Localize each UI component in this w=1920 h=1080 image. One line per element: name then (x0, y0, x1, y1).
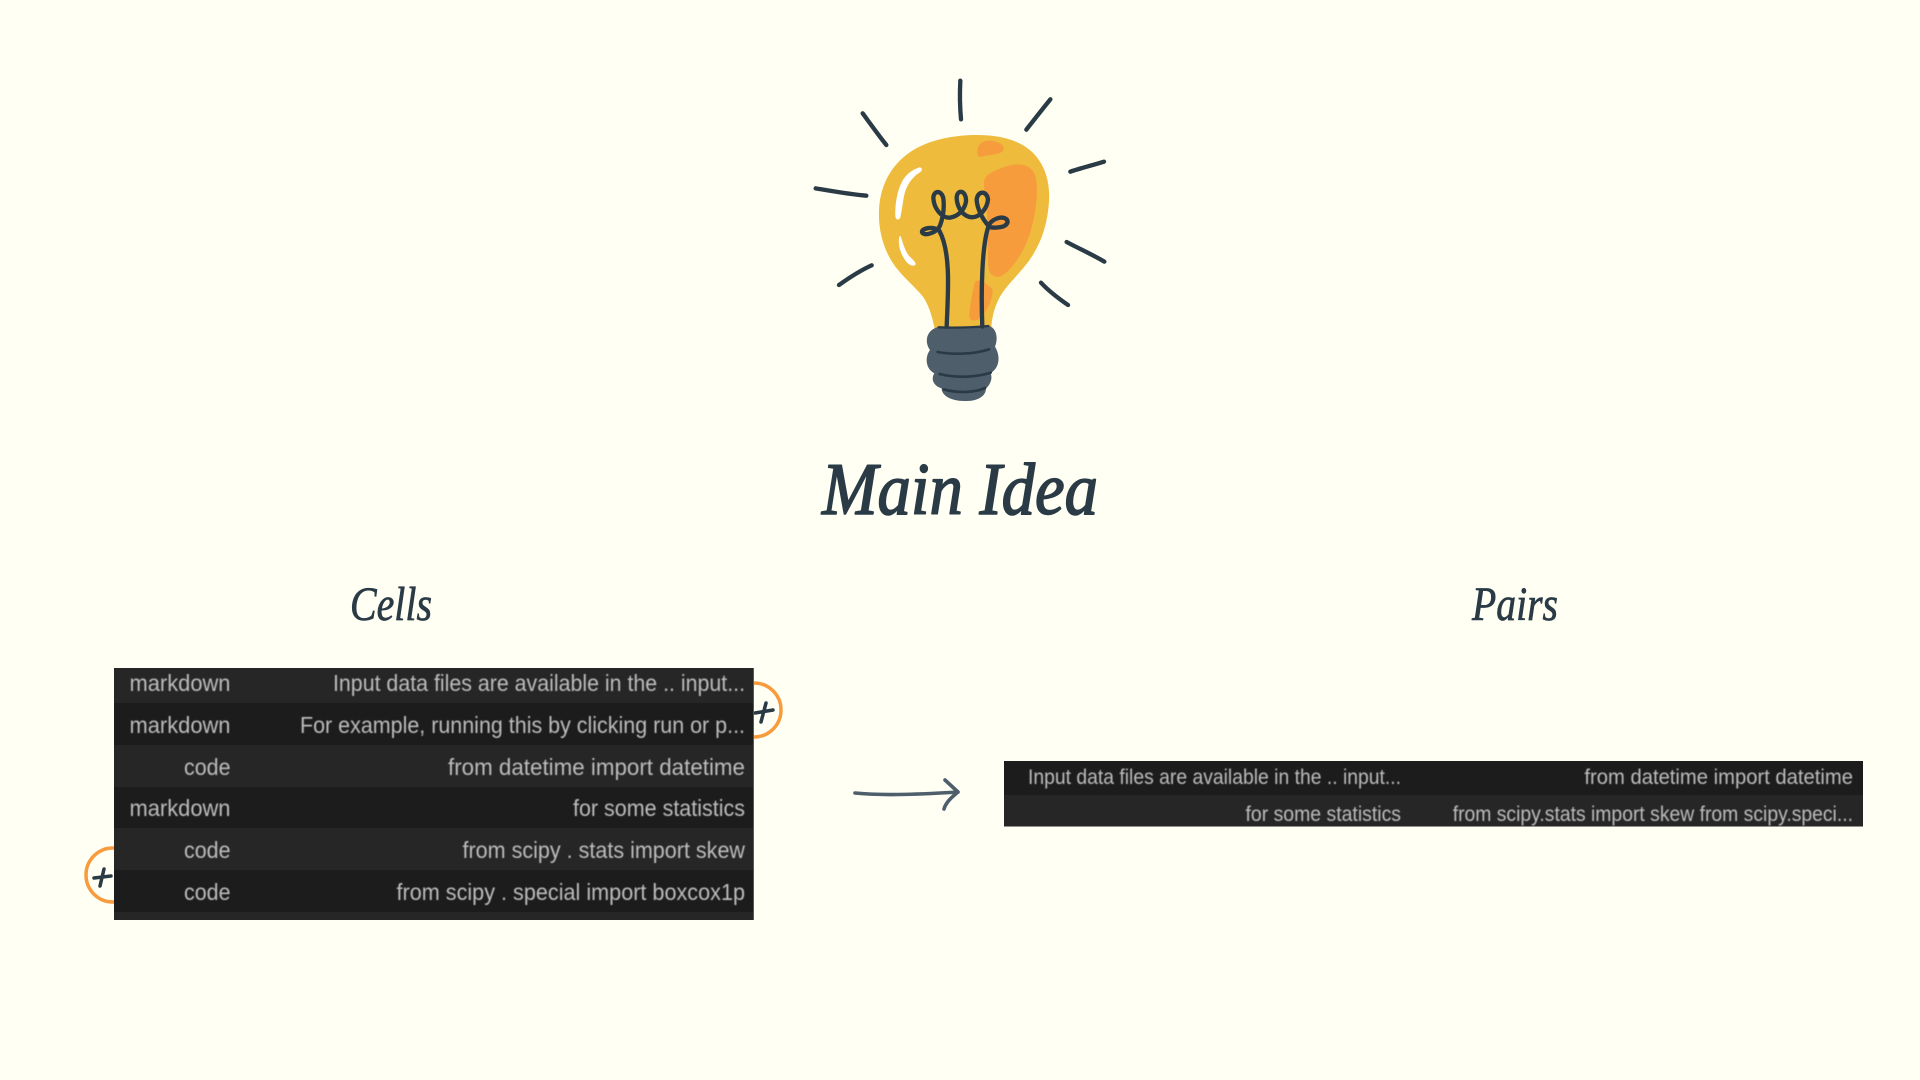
bulb neck line (939, 326, 988, 328)
callout: top merge bracket (727, 683, 781, 737)
cell rows text: from scipy . special import boxcox1p (396, 879, 745, 905)
plus sign (755, 703, 773, 722)
callout: bottom merge bracket (86, 848, 140, 902)
table: pairs (1004, 761, 1863, 826)
cell rows text: Input data files are available in the .. input... (333, 670, 745, 696)
glass reflections (895, 167, 922, 266)
pair rows text (1028, 766, 1853, 826)
plus sign (94, 869, 111, 886)
orange highlights (969, 141, 1037, 321)
heading: Cells: Cells (350, 578, 432, 631)
table: cells (114, 668, 754, 920)
filament (922, 192, 1008, 327)
cell rows text: code (184, 837, 230, 863)
pair rows text: for some statistics (1246, 803, 1401, 826)
bulb rays (816, 81, 1104, 305)
glass globe (879, 135, 1049, 328)
cell rows text: markdown (130, 712, 230, 738)
cell rows text: from scipy . stats import skew (462, 837, 745, 863)
cell rows text: markdown (130, 670, 230, 696)
arrow (855, 780, 958, 809)
cell rows text: For example, running this by clicking run or p... (300, 712, 745, 738)
cell rows text: for some statistics (573, 795, 745, 821)
pair rows text: Input data files are available in the .. input... (1028, 766, 1401, 789)
cell rows text (130, 670, 745, 905)
cell rows text: code (184, 754, 230, 780)
pair rows text: from datetime import datetime (1584, 766, 1853, 789)
icon: light bulb (816, 81, 1104, 401)
cell rows text: code (184, 879, 230, 905)
heading: Pairs: Pairs (1471, 578, 1558, 631)
cell rows text: from datetime import datetime (448, 754, 745, 780)
cell rows text: markdown (130, 795, 230, 821)
pair rows text: from scipy.stats import skew from scipy.speci... (1453, 803, 1853, 826)
screw base (927, 326, 999, 401)
title: Main Idea (821, 449, 1098, 531)
